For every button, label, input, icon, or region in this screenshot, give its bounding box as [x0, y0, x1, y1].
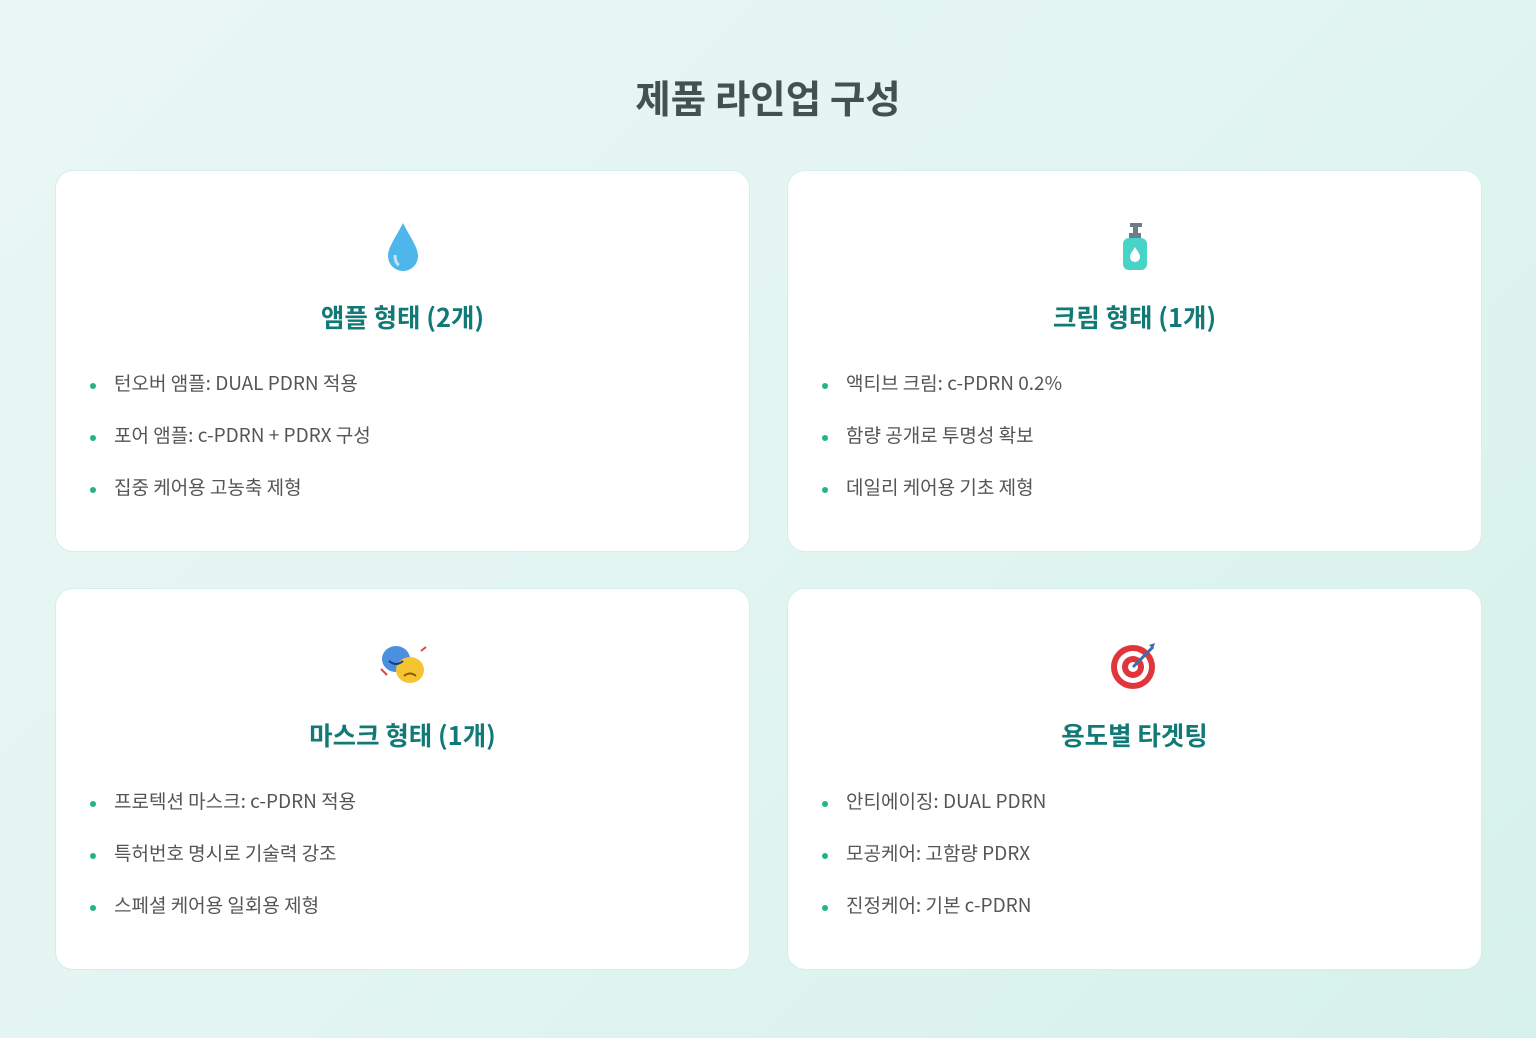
list	[822, 787, 1046, 918]
list: 집중 케어용 고농축 제형	[114, 473, 302, 500]
list: 특허번호 명시로 기술력 강조	[114, 839, 337, 866]
list	[822, 369, 1062, 500]
icon: water drop	[388, 223, 418, 271]
list: 데일리 케어용 기초 제형	[846, 473, 1034, 500]
list	[90, 369, 371, 500]
list: 스페셜 케어용 일회용 제형	[114, 891, 319, 918]
panel: cream	[787, 170, 1482, 552]
panel: targeting	[787, 588, 1482, 970]
list: 진정케어: 기본 c-PDRN	[846, 891, 1031, 918]
list: 모공케어: 고함량 PDRX	[846, 839, 1030, 866]
title: 제품 라인업 구성	[635, 69, 901, 125]
heading: 앰플 형태 (2개)	[321, 298, 484, 335]
icon: pump bottle	[1123, 223, 1147, 270]
panel: mask	[55, 588, 750, 970]
list: 턴오버 앰플: DUAL PDRN 적용	[114, 369, 358, 396]
list: 포어 앰플: c-PDRN + PDRX 구성	[114, 421, 371, 448]
list: 안티에이징: DUAL PDRN	[846, 787, 1046, 814]
list: 함량 공개로 투명성 확보	[846, 421, 1034, 448]
heading: 크림 형태 (1개)	[1053, 298, 1216, 335]
icon: masks	[380, 646, 427, 683]
list: 프로텍션 마스크: c-PDRN 적용	[114, 787, 356, 814]
list	[90, 787, 356, 918]
icon: target	[1111, 643, 1155, 689]
heading: 마스크 형태 (1개)	[309, 716, 496, 753]
list: 액티브 크림: c-PDRN 0.2%	[846, 369, 1062, 396]
panel: ampoule	[55, 170, 750, 552]
heading: 용도별 타겟팅	[1061, 716, 1208, 753]
